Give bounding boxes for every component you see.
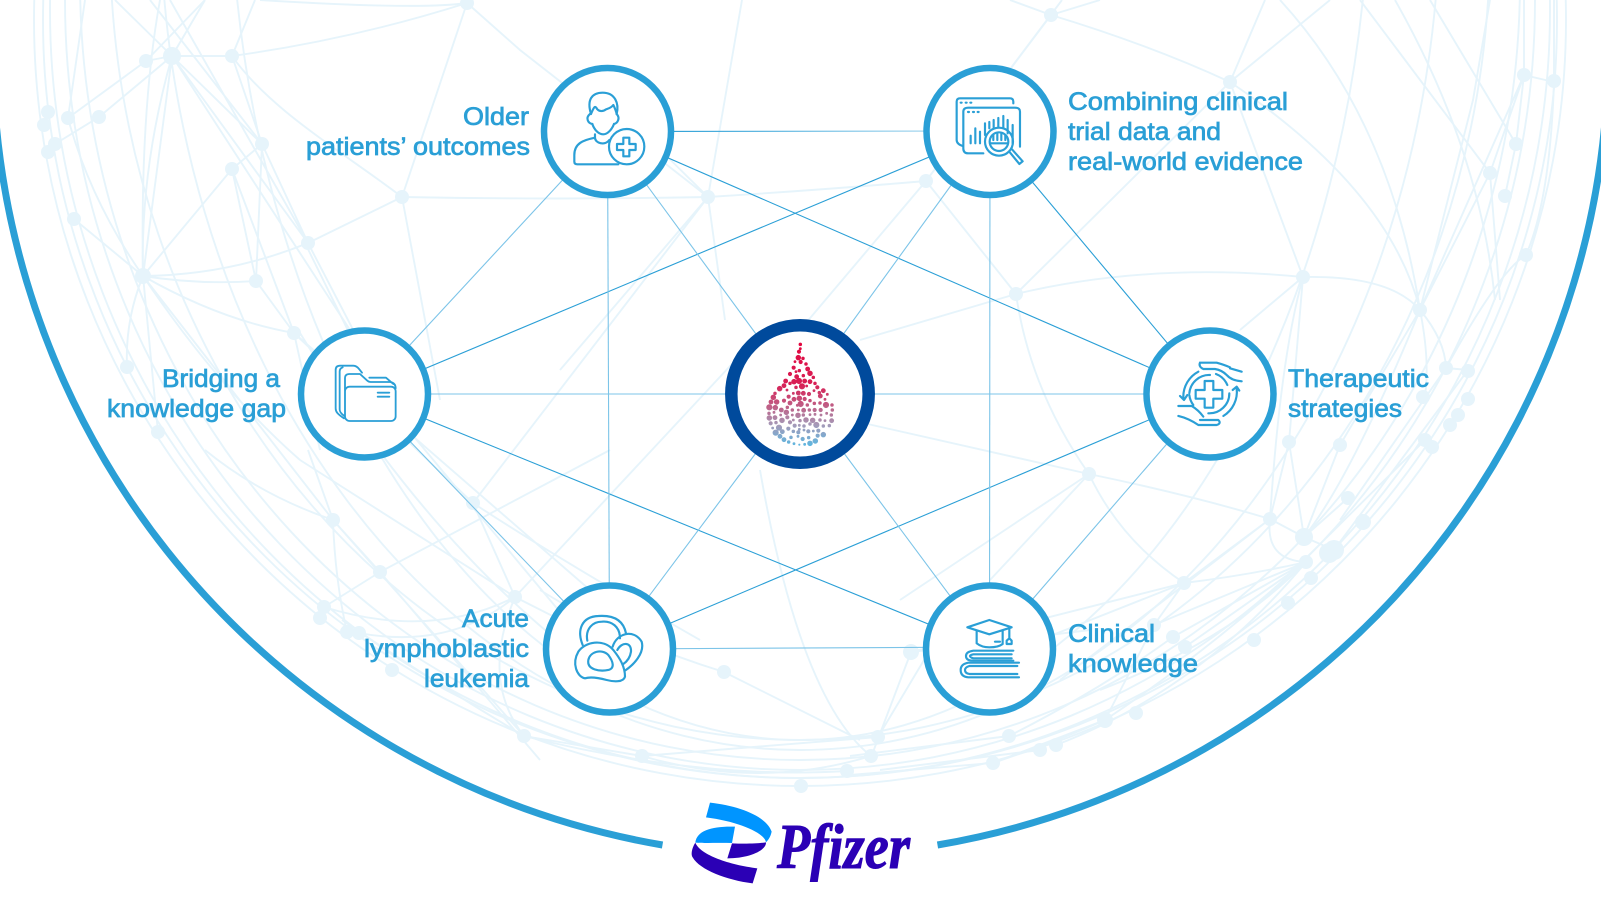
icon: Pfizer ribbon mark [692, 803, 772, 883]
label: combining clinical trial data and real-world evidence: real-world evidence [1068, 148, 1303, 176]
outer arc right [938, 0, 1601, 845]
label: older patients' outcomes: Older [463, 103, 529, 131]
label: combining clinical trial data and real-world evidence: Combining clinical [1068, 88, 1288, 116]
label: bridging a knowledge gap: knowledge gap [107, 395, 286, 423]
Pfizer logo [692, 803, 911, 883]
label: older patients' outcomes: patients’ outcomes [306, 133, 530, 161]
icon: folders [336, 366, 396, 421]
label: clinical knowledge: Clinical [1068, 620, 1155, 648]
connection lines [364, 131, 1210, 649]
outer arc left [0, 0, 662, 845]
icon: graduation cap and books [961, 620, 1019, 677]
label: older patients' outcomes [306, 103, 530, 161]
label: bridging a knowledge gap: Bridging a [162, 365, 280, 393]
label: therapeutic strategies: Therapeutic [1288, 365, 1429, 393]
label: acute lymphoblastic leukemia: lymphoblastic [364, 635, 529, 663]
icon: blood drop of dots [767, 343, 834, 446]
label: therapeutic strategies [1288, 365, 1429, 423]
label: clinical knowledge: knowledge [1068, 650, 1198, 678]
node: bridging a knowledge gap [301, 330, 428, 458]
icon: hands around medical cross [1178, 363, 1242, 425]
label: acute lymphoblastic leukemia: leukemia [424, 665, 529, 693]
label: acute lymphoblastic leukemia: Acute [462, 605, 529, 633]
icon: leukemia cells [575, 616, 642, 681]
label: therapeutic strategies: strategies [1288, 395, 1402, 423]
label: combining clinical trial data and real-world evidence [1068, 88, 1303, 176]
node: combining clinical trial data [926, 68, 1054, 195]
label: bridging a knowledge gap [107, 365, 286, 423]
label: acute lymphoblastic leukemia [364, 605, 529, 693]
node: older patients' outcomes [544, 68, 671, 195]
node: central blood drop [731, 325, 869, 463]
node: clinical knowledge [926, 586, 1053, 712]
label: clinical knowledge [1068, 620, 1198, 678]
node: therapeutic strategies [1146, 330, 1274, 458]
node: acute lymphoblastic leukemia [546, 586, 673, 712]
text: Pfizer wordmark: Pfizer [776, 811, 911, 882]
icon: data windows with magnifier [957, 98, 1023, 164]
icon: person with plus [574, 93, 644, 164]
label: combining clinical trial data and real-world evidence: trial data and [1068, 118, 1221, 146]
